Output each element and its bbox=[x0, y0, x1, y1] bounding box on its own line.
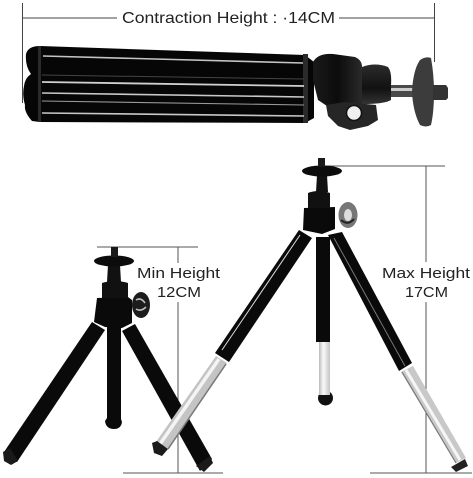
label: max height bbox=[382, 265, 471, 301]
label: max height: 17CM bbox=[405, 284, 448, 301]
folded lock ring bbox=[326, 102, 378, 130]
folded tripod bbox=[23, 46, 448, 130]
label: min height: Min Height bbox=[137, 265, 221, 282]
left leg bbox=[152, 230, 312, 456]
folded mounting knob bbox=[412, 57, 434, 127]
label: min height: 12CM bbox=[157, 284, 201, 301]
folded head collar bbox=[313, 54, 362, 108]
center leg bbox=[105, 326, 122, 429]
folded legs bbox=[23, 46, 314, 123]
mounting knob bbox=[302, 166, 342, 176]
dimension: max height bbox=[325, 166, 472, 473]
label: min height bbox=[137, 265, 221, 301]
dimension: min height bbox=[97, 247, 223, 473]
folded stem bbox=[391, 85, 414, 97]
right leg bbox=[122, 324, 212, 471]
short tripod bbox=[3, 247, 213, 472]
mounting screw bbox=[111, 247, 118, 257]
tall tripod bbox=[152, 158, 468, 472]
mounting knob bbox=[94, 256, 134, 266]
center leg bbox=[316, 237, 333, 406]
lower head bbox=[303, 207, 335, 234]
dimension: contraction height bbox=[22, 3, 434, 103]
mounting screw bbox=[318, 158, 325, 167]
label: contraction height: Contraction Height : ·14CM bbox=[122, 10, 335, 27]
folded head neck bbox=[362, 64, 391, 104]
lock knob bbox=[132, 292, 150, 318]
upper head bbox=[102, 281, 128, 298]
stem bbox=[107, 265, 121, 282]
right leg bbox=[328, 232, 468, 472]
label: max height: Max Height bbox=[382, 265, 471, 282]
lock knob bbox=[338, 202, 358, 228]
upper head bbox=[308, 191, 330, 208]
stem bbox=[316, 175, 328, 192]
lower head bbox=[94, 297, 132, 328]
left leg bbox=[4, 322, 105, 462]
folded mounting screw bbox=[433, 85, 448, 100]
